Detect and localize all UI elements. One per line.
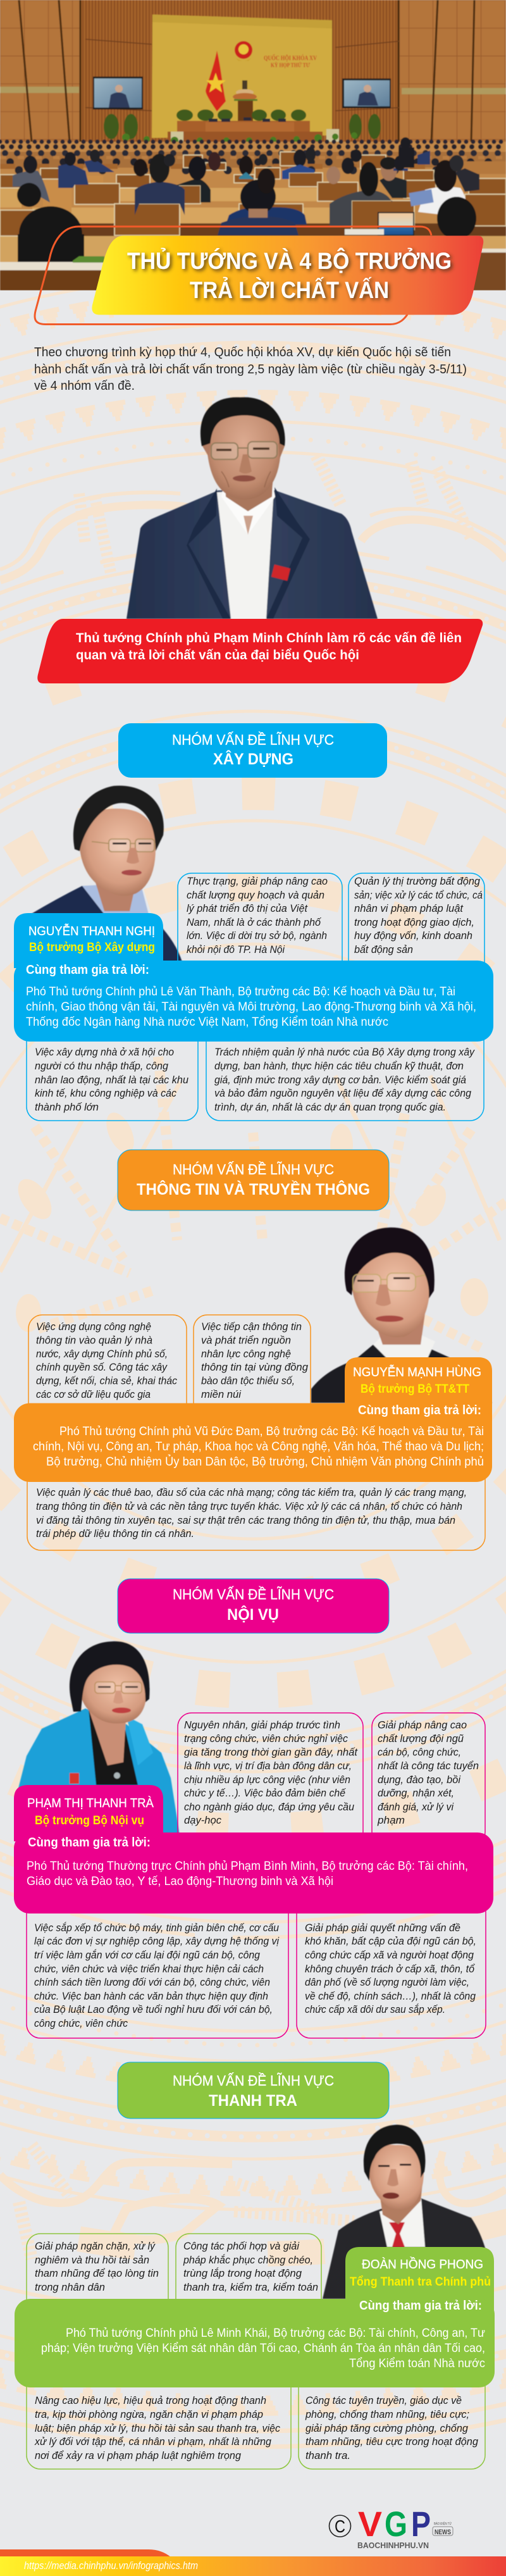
hero photo: National Assembly hall: KỲ HỌP THỨ TƯ	[271, 62, 311, 68]
bust and flowers	[233, 80, 257, 122]
title text	[127, 247, 452, 303]
bird bands near top	[0, 505, 190, 580]
issue box: state management: và bảo đảm nguồn nguyên vật liệu để xây dựng các công	[214, 1087, 472, 1099]
intro text: Theo chương trình kỳ họp thứ 4, Quốc hội khóa XV, dự kiến Quốc hội sẽ tiến	[34, 345, 451, 359]
emblem	[235, 41, 252, 61]
issue box: communication on corruption: thanh tra.	[305, 2449, 350, 2461]
issue box: civil servants: trạng công chức, viên chức nghỉ việc	[184, 1733, 348, 1745]
panel: co-respondents inspection	[15, 2247, 495, 2387]
issue box: civil servants	[178, 1713, 363, 1846]
issue box: overlap coordination: Công tác phối hợp và giải	[183, 2240, 300, 2252]
issue box: civil servants: Nguyên nhân, giải pháp trước tình	[184, 1719, 340, 1731]
heading: home affairs	[118, 1579, 389, 1633]
panel: co-respondents home affairs: Cùng tham gia trả lời:	[28, 1836, 151, 1850]
issue box: social housing: nhân lao động, nhất là tại các khu	[35, 1074, 189, 1086]
issue box: real estate: bất động sản	[354, 943, 413, 955]
section 3: home affairs	[14, 1579, 493, 2038]
issue box: ethnic minority areas: miền núi	[201, 1388, 242, 1400]
issue box: staff quality: cán bộ, công chức,	[378, 1746, 461, 1758]
logo: VGP: BÁO ĐIỆN TỬ	[434, 2521, 452, 2526]
section 4: inspection	[15, 2062, 495, 2469]
issue box: social housing: Việc xây dựng nhà ở xã hội cho	[35, 1046, 174, 1058]
issue box: real estate: trong hoạt động giao dịch,	[354, 916, 474, 928]
panel: co-respondents information: Phó Thủ tướng Chính phủ Vũ Đức Đam, Bộ trưởng các Bộ: Kế hoạch và Đầu tư, Tài	[59, 1425, 484, 1438]
panel: co-respondents inspection: Cùng tham gia trả lời:	[359, 2299, 482, 2313]
icon: copyright	[329, 2515, 350, 2537]
plants	[104, 109, 381, 139]
issue box: civil servants: cho ngành giáo dục, đáp ứng yêu cầu	[184, 1801, 355, 1813]
issue box: organisational restructuring	[27, 1898, 288, 2038]
issue box: civil servants: là lĩnh vực, vị trí địa bàn đông dân cư,	[184, 1760, 352, 1772]
name tag: Nguyen Thanh Nghi: Bộ trưởng Bộ Xây dựng	[29, 940, 155, 954]
issue box: anti-corruption: nghiêm và thu hồi tài sản	[35, 2254, 149, 2266]
issue box: staff quality: đánh giá, xử lý vi	[378, 1801, 454, 1813]
flag	[206, 51, 226, 111]
heading: home affairs: NHÓM VẤN ĐỀ LĨNH VỰC	[173, 1586, 334, 1602]
seat backs	[0, 152, 506, 236]
logo: VGP: NEWS	[435, 2529, 451, 2536]
issue box: social housing	[27, 1025, 198, 1121]
issue box: planning: khỏi nội đô TP. Hà Nội	[187, 943, 285, 955]
issue box: subscribers and websites: vi đăng tải thông tin xuyên tạc, sai sự thật trên các trang thông tin điện tử, thu thập, mua bán	[36, 1514, 455, 1526]
portrait: Nguyen Manh Hung	[311, 1228, 492, 1403]
section 1: construction	[14, 723, 493, 1121]
back wall yellow panel	[152, 15, 332, 138]
title text: TRẢ LỜI CHẤT VẤN	[190, 277, 389, 303]
panel: co-respondents construction: Phó Thủ tướng Chính phủ Lê Văn Thành, Bộ trưởng các Bộ: Kế hoạch và Đầu tư, Tài	[26, 985, 455, 999]
panel: co-respondents information: chính, Nội vụ, Công an, Tư pháp, Khoa học và Công nghệ, Văn hóa, Thể thao và Du lịch;	[33, 1440, 484, 1453]
heading: inspection: NHÓM VẤN ĐỀ LĨNH VỰC	[173, 2072, 334, 2089]
issue box: organisational restructuring: lại các đơn vị sự nghiệp công lập, xây dựng hệ thống vị	[34, 1935, 280, 1947]
issue box: planning: Nam, nhất là ở các thành phố	[187, 916, 321, 928]
issue box: real estate	[349, 873, 484, 981]
icon: copyright: C	[335, 2517, 345, 2536]
name tag: Pham Thi Thanh Tra	[14, 1785, 163, 1841]
issue box: state management	[206, 1025, 484, 1121]
callout: Prime Minister role: Thủ tướng Chính phủ Phạm Minh Chính làm rõ các vấn đề liên	[76, 630, 462, 645]
issue box: digital government: thông tin vào quản lý nhà	[36, 1334, 152, 1347]
issue box: state management: dựng, ban hành, thực hiện các tiêu chuẩn kỹ thuật, đơn	[214, 1060, 464, 1072]
issue box: planning: lý phát triển đô thị của Việt	[187, 902, 308, 914]
name tag: Nguyen Thanh Nghi	[14, 913, 163, 968]
issue box: digital government: các cơ sở dữ liệu quốc gia	[36, 1388, 151, 1400]
portrait: Pham Thi Thanh Tra	[18, 1641, 180, 1835]
dais	[177, 121, 310, 134]
issue box: staff quality: dụng, đào tạo, bồi	[378, 1774, 461, 1786]
issue box: ethnic minority areas: bào dân tộc thiểu số,	[201, 1374, 295, 1387]
issue box: subscribers and websites	[27, 1462, 485, 1550]
heading: information and communications: NHÓM VẤN ĐỀ LĨNH VỰC	[173, 1160, 334, 1178]
logo: VGP: BAOCHINHPHU.VN	[357, 2541, 429, 2550]
issue box: inspection effectiveness	[27, 2373, 291, 2469]
panel: co-respondents construction: chính, Giao thông vận tải, Tài nguyên và Môi trường, Lao động-Thương binh và Xã hội,	[26, 1000, 476, 1014]
issue box: state management: trình, dự án, nhất là các dự án quan trọng quốc gia.	[214, 1101, 446, 1113]
issue box: staff quality: dưỡng, nhận xét,	[378, 1787, 454, 1799]
issue box: overlap coordination	[176, 2234, 321, 2313]
footer bar: https://media.chinhphu.vn/infographics.htm	[24, 2560, 198, 2572]
issue box: planning: Thực trạng, giải pháp nâng cao	[187, 875, 328, 887]
issue box: staff quality	[372, 1713, 485, 1846]
title text: THỦ TƯỚNG VÀ 4 BỘ TRƯỞNG	[127, 247, 452, 274]
section 2: information and communications	[14, 1150, 492, 1550]
title background	[92, 235, 483, 315]
name tag: Pham Thi Thanh Tra: PHẠM THỊ THANH TRÀ	[27, 1796, 154, 1810]
issue box: real estate: Quản lý thị trường bất động	[354, 875, 481, 887]
issue box: organisational restructuring: công chức, viên chức	[34, 2017, 128, 2029]
issue box: commune officials: công chức cấp xã và người hoạt động	[305, 1949, 474, 1961]
screens	[93, 77, 143, 109]
logo: VGP: G	[385, 2504, 407, 2544]
issue box: staff quality: chất lượng đội ngũ	[378, 1733, 464, 1745]
panel: co-respondents inspection: pháp; Viện trưởng Viện Kiểm sát nhân dân Tối cao, Chánh án Tòa án nhân dân Tối cao,	[41, 2342, 485, 2355]
issue box: communication on corruption: tham nhũng, tiêu cực trong hoạt động	[305, 2436, 479, 2448]
heading: inspection	[118, 2062, 389, 2119]
heading: construction: NHÓM VẤN ĐỀ LĨNH VỰC	[172, 731, 334, 748]
logo: VGP: V	[358, 2504, 382, 2544]
issue box: inspection effectiveness: tra, kịp thời phòng ngừa, ngăn chặn vi phạm pháp	[35, 2408, 263, 2420]
panel: co-respondents information	[14, 1357, 492, 1482]
hero photo: National Assembly hall	[0, 0, 506, 290]
portrait: Nguyen Thanh Nghi	[30, 786, 182, 962]
panel: co-respondents home affairs	[14, 1832, 493, 1913]
issue box: social housing: thành phố lớn	[35, 1101, 99, 1113]
issue box: planning: chất lượng quy hoạch và quản	[187, 889, 324, 901]
issue box: commune officials	[297, 1898, 486, 2038]
issue box: communication on corruption: phòng, chống tham nhũng, tiêu cực;	[305, 2408, 469, 2420]
panel: co-respondents information: Bộ trưởng, Chủ nhiệm Ủy ban Dân tộc, Bộ trưởng, Chủ nhiệm Văn phòng Chính phủ	[46, 1455, 484, 1469]
panel: co-respondents construction	[14, 961, 493, 1042]
logo: VGP	[329, 2504, 453, 2550]
issue box: organisational restructuring: Việc sắp xếp tổ chức bộ máy, tinh giản biên chế, cơ cấu	[34, 1922, 279, 1934]
far audience rows	[0, 142, 506, 170]
bird bands near bottom	[0, 2162, 232, 2203]
heading: information and communications: THÔNG TIN VÀ TRUYỀN THÔNG	[137, 1179, 370, 1198]
issue box: organisational restructuring: chức. Việc ban hành các văn bản thực hiện quy định	[34, 1990, 268, 2002]
panel: co-respondents inspection: Phó Thủ tướng Chính phủ Lê Minh Khái, Bộ trưởng các Bộ: Tài chính, Công an, Tư	[66, 2327, 485, 2340]
callout: Prime Minister role: quan và trả lời chất vấn của đại biểu Quốc hội	[76, 647, 359, 663]
floor of desks	[0, 140, 506, 224]
heading: inspection: THANH TRA	[209, 2092, 297, 2110]
intro text	[34, 345, 467, 393]
issue box: planning: lớn. Việc di dời trụ sở bộ, ngành	[187, 930, 327, 942]
issue box: commune officials: chức cấp xã dôi dư sau sắp xếp.	[305, 2003, 445, 2015]
title outline	[35, 227, 431, 324]
background pattern: star petals	[11, 1109, 488, 1332]
issue box: digital government: dựng, kết nối, chia sẻ, khai thác	[36, 1374, 177, 1387]
issue box: staff quality: phạm	[377, 1814, 405, 1826]
name tag: Nguyen Thanh Nghi: NGUYỄN THANH NGHỊ	[28, 924, 155, 938]
issue box: civil servants: dạy-học	[184, 1814, 221, 1826]
issue box: commune officials: Giải pháp giải quyết những vấn đề	[305, 1922, 460, 1934]
panel: co-respondents inspection: ĐOÀN HỒNG PHONG	[362, 2256, 483, 2272]
issue box: anti-corruption: trong nhân dân	[35, 2281, 105, 2293]
issue box: anti-corruption: Giải pháp ngăn chặn, xử lý	[35, 2240, 156, 2252]
issue box: ethnic minority areas: nhân lực công nghệ	[201, 1348, 291, 1360]
issue box: inspection effectiveness: Nâng cao hiệu lực, hiệu quả trong hoạt động thanh	[35, 2394, 266, 2406]
issue box: ethnic minority areas: và phát triển nguồn	[201, 1334, 291, 1347]
issue box: overlap coordination: trùng lắp trong hoạt động	[183, 2267, 302, 2279]
panel: co-respondents inspection: Tổng Thanh tra Chính phủ	[350, 2275, 491, 2289]
heading: construction	[118, 723, 387, 778]
panel: co-respondents information: Bộ trưởng Bộ TT&TT	[361, 1382, 469, 1396]
issue box: digital government: chính quyền số. Công tác xây	[36, 1361, 168, 1373]
issue box: organisational restructuring: chức, viên chức và việc triển khai thực hiện cải cách	[34, 1963, 264, 1975]
callout: Prime Minister role	[37, 619, 483, 683]
panel: co-respondents construction: Cùng tham gia trả lời:	[26, 963, 149, 977]
hall wall	[0, 0, 506, 290]
title banner	[35, 227, 483, 324]
panel: co-respondents information: Cùng tham gia trả lời:	[358, 1403, 481, 1417]
issue box: ethnic minority areas	[194, 1315, 311, 1422]
issue box: subscribers and websites: trái phép dữ liệu thông tin cá nhân.	[36, 1528, 194, 1540]
portrait: Doan Hong Phong	[323, 2125, 488, 2299]
issue box: commune officials: khó khăn, bất cập của đội ngũ cán bộ,	[305, 1935, 476, 1947]
issue box: planning	[178, 873, 342, 981]
issue box: communication on corruption: giải pháp tăng cường phòng, chống	[305, 2422, 469, 2434]
issue box: civil servants: gia tăng trong thời gian gần đây, nhất	[184, 1746, 358, 1758]
panel: co-respondents home affairs: Giáo dục và Đào tạo, Y tế, Lao động-Thương binh và Xã hội	[27, 1875, 333, 1888]
issue box: inspection effectiveness: xử lý đối với tập thể, cá nhân vi phạm, nhất là những	[34, 2436, 272, 2448]
issue box: subscribers and websites: Việc quản lý các thuê bao, đầu số của các nhà mạng; công tác kiểm tra, quản lý các trang mạng,	[36, 1486, 467, 1498]
issue box: overlap coordination: pháp khắc phục chồng chéo,	[183, 2254, 313, 2266]
issue box: state management: Trách nhiệm quản lý nhà nước của Bộ Xây dựng trong xây	[214, 1046, 475, 1058]
issue box: anti-corruption: tham nhũng để tạo lòng tin	[35, 2267, 159, 2279]
issue box: commune officials: không chuyên trách ở cấp xã, thôn, tổ	[305, 1963, 475, 1975]
issue box: real estate: huy động vốn, kinh doanh	[354, 930, 472, 942]
issue box: digital government: nước, xây dựng Chính phủ số,	[36, 1348, 168, 1360]
logo: VGP: P	[411, 2504, 431, 2544]
issue box: organisational restructuring: trí việc làm gắn với cơ cấu lại đội ngũ cán bộ, công	[34, 1949, 261, 1961]
issue box: digital government: Việc ứng dụng công nghệ	[36, 1321, 151, 1333]
issue box: social housing: người có thu nhập thấp, công	[35, 1060, 169, 1072]
glasses	[211, 442, 277, 459]
issue box: digital government	[28, 1315, 187, 1422]
issue box: commune officials: dân phố (về số lượng người làm việc,	[305, 1976, 469, 1988]
heading: home affairs: NỘI VỤ	[227, 1605, 279, 1624]
issue box: real estate: nhân vi phạm pháp luật	[354, 902, 464, 914]
issue box: organisational restructuring: của Bộ luật Lao động về tuổi nghỉ hưu đối với cán bộ,	[34, 2003, 273, 2015]
issue box: communication on corruption	[299, 2373, 485, 2469]
issue box: anti-corruption	[27, 2234, 168, 2313]
panel: co-respondents information: NGUYỄN MẠNH HÙNG	[353, 1365, 481, 1379]
wall caption: QUỐC HỘI KHÓA XV	[264, 54, 317, 62]
portrait: Prime Minister	[126, 397, 378, 619]
issue box: social housing: kinh tế, khu công nghiệp và các	[35, 1087, 176, 1099]
issue box: subscribers and websites: trang thông tin điện tử và các nền tảng trực tuyến khác. Việc xử lý các cá nhân, tổ chức có hành	[36, 1500, 462, 1512]
panel: co-respondents inspection: Tổng Kiểm toán Nhà nước	[349, 2357, 485, 2370]
issue box: civil servants: chịu nhiều áp lực công việc (như viên	[184, 1774, 350, 1786]
name tag: Pham Thi Thanh Tra: Bộ trưởng Bộ Nội vụ	[35, 1814, 144, 1827]
issue box: inspection effectiveness: luật; biện pháp xử lý, thu hồi tài sản sau thanh tra, việc	[35, 2422, 280, 2434]
issue box: overlap coordination: thanh tra, kiểm tra, kiểm toán	[183, 2281, 318, 2293]
issue box: ethnic minority areas: thông tin tại vùng đồng	[201, 1361, 309, 1373]
issue box: staff quality: nhất là công tác tuyển	[378, 1760, 479, 1772]
heading: information and communications	[118, 1150, 389, 1210]
issue box: civil servants: chức y tế…). Việc bảo đảm biên chế	[184, 1787, 346, 1799]
heading: construction: XÂY DỰNG	[213, 749, 293, 768]
intro text: hành chất vấn và trả lời chất vấn trong 2,5 ngày làm việc (từ chiều ngày 3-5/11)	[34, 363, 467, 376]
desks row bands	[120, 188, 329, 201]
issue box: state management: giá, định mức trong xây dựng cơ bản. Việc kiểm soát giá	[214, 1074, 466, 1086]
issue box: ethnic minority areas: Việc tiếp cận thông tin	[201, 1321, 302, 1333]
people in the hall	[13, 137, 479, 263]
issue box: organisational restructuring: chính sách tiền lương đối với cán bộ, công chức, viên	[34, 1976, 270, 1988]
issue box: staff quality: Giải pháp nâng cao	[378, 1719, 467, 1731]
footer bar	[0, 2549, 506, 2576]
intro text: về 4 nhóm vấn đề.	[34, 379, 135, 393]
issue box: commune officials: về chế độ, chính sách…), nhất là công	[305, 1990, 476, 2002]
issue box: inspection effectiveness: nơi để xảy ra vi phạm pháp luật nghiêm trọng	[35, 2449, 242, 2461]
issue box: real estate: sản; việc xử lý các tổ chức, cá	[354, 889, 483, 901]
panel: co-respondents home affairs: Phó Thủ tướng Thường trực Chính phủ Phạm Bình Minh, Bộ trưởng các Bộ: Tài chính,	[27, 1860, 468, 1873]
issue box: communication on corruption: Công tác tuyên truyền, giáo dục về	[305, 2394, 462, 2406]
panel: co-respondents construction: Thống đốc Ngân hàng Nhà nước Việt Nam, Tổng Kiểm toán Nhà nước	[26, 1016, 388, 1029]
